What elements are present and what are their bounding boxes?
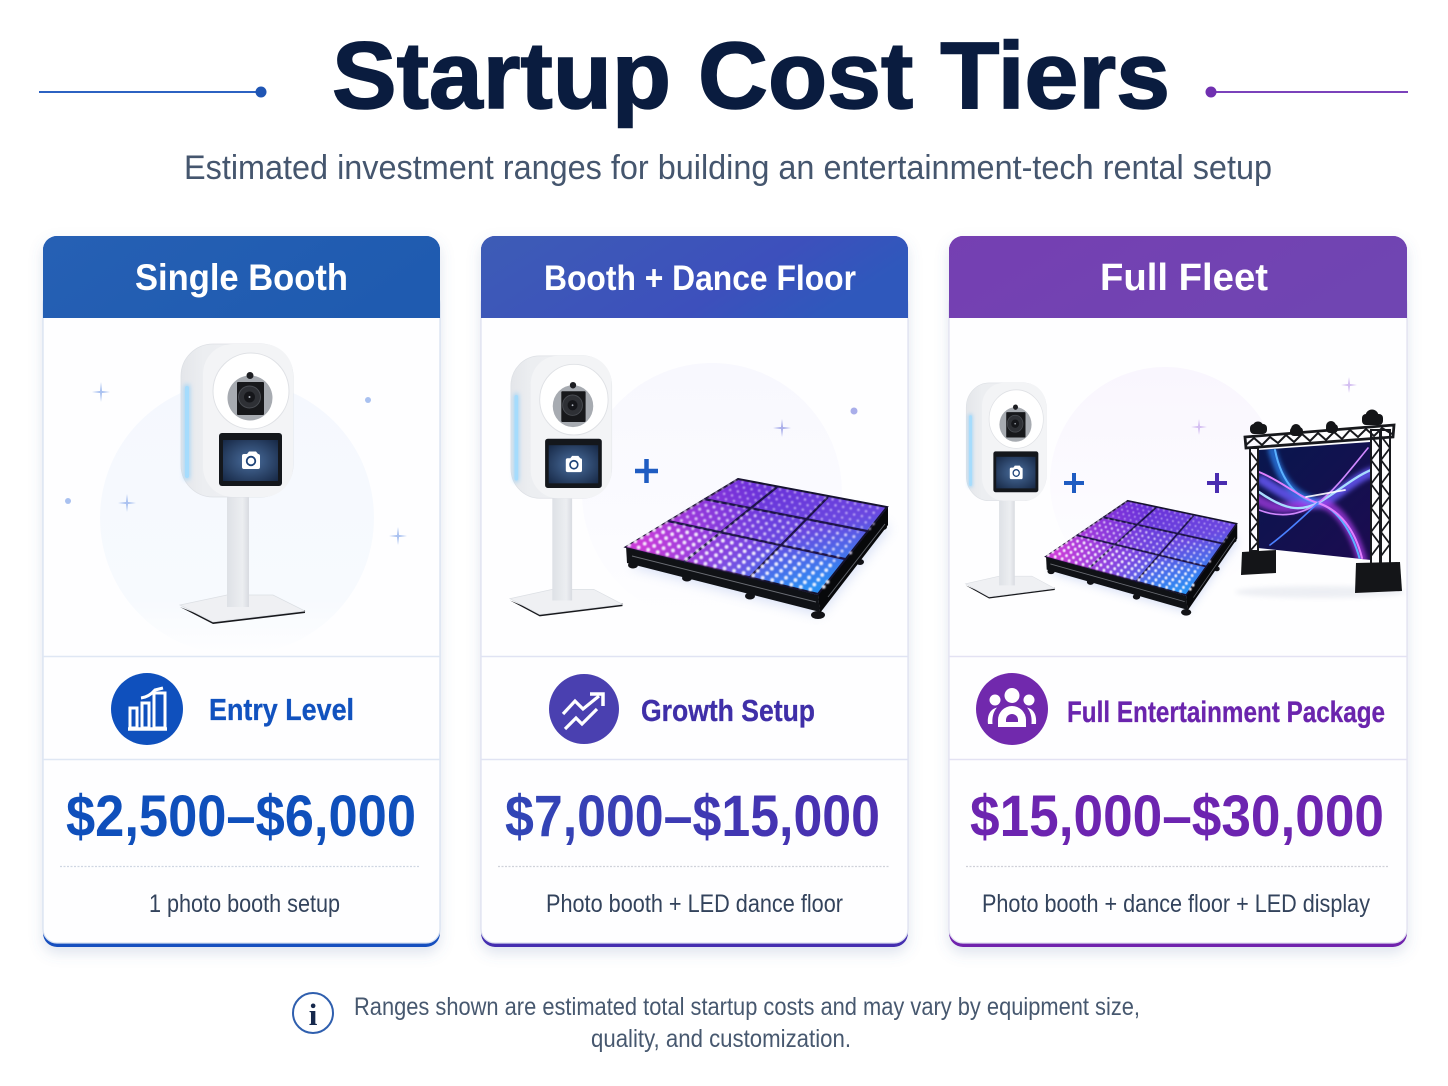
- plus sign: [1207, 473, 1227, 493]
- icon: entry level bar chart: [111, 673, 183, 745]
- title rule left: [39, 86, 266, 98]
- price range: $7,000–$15,000: [505, 784, 880, 849]
- description: 1 photo booth setup: [149, 890, 340, 918]
- icon: photo booth: [510, 356, 622, 616]
- card header: Booth + Dance Floor: [544, 259, 856, 298]
- title: Startup Cost Tiers: [332, 23, 1170, 129]
- icon: info: [293, 993, 333, 1033]
- plus sign: [635, 459, 658, 483]
- card header: [949, 236, 1407, 318]
- icon: LED video wall on truss: [1235, 410, 1405, 598]
- panel: Full Fleet: [949, 236, 1407, 947]
- plus sign: [1064, 473, 1084, 493]
- card header: Single Booth: [135, 257, 348, 298]
- card header: Full Fleet: [1100, 257, 1268, 299]
- icon: photo booth: [180, 344, 305, 624]
- description: Photo booth + dance floor + LED display: [982, 890, 1370, 918]
- price range: $2,500–$6,000: [66, 784, 416, 849]
- sparkles: [65, 382, 407, 545]
- card header: [43, 236, 440, 318]
- icon: LED dance floor: [1046, 501, 1239, 616]
- footnote: quality, and customization.: [591, 1025, 851, 1053]
- title rule right: [1206, 86, 1408, 98]
- description: Photo booth + LED dance floor: [546, 890, 843, 918]
- icon: group of people: [976, 673, 1048, 745]
- icon: info: i: [309, 997, 318, 1032]
- icon: LED dance floor: [626, 479, 890, 619]
- backdrop circle: [1050, 367, 1280, 597]
- sparkles: [773, 408, 858, 437]
- icon: photo booth: [966, 383, 1055, 598]
- card header: [481, 236, 908, 318]
- tier label: Entry Level: [209, 692, 354, 727]
- tier label: Growth Setup: [641, 693, 815, 728]
- sparkles: [1191, 377, 1357, 435]
- subtitle: Estimated investment ranges for building an entertainment-tech rental setup: [184, 149, 1272, 187]
- panel: Single Booth: [43, 236, 440, 947]
- icon: growth chart: [549, 674, 619, 744]
- footnote: Ranges shown are estimated total startup costs and may vary by equipment size,: [354, 993, 1140, 1021]
- footnote: [354, 993, 1140, 1053]
- panel: Booth + Dance Floor: [481, 236, 908, 947]
- backdrop circle: [100, 381, 374, 655]
- price range: $15,000–$30,000: [970, 784, 1384, 849]
- backdrop circle: [582, 363, 842, 623]
